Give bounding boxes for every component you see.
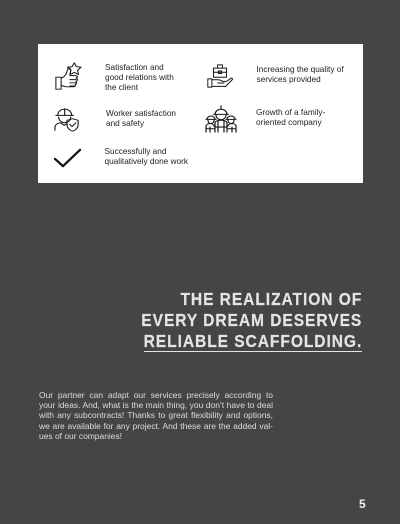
body text (39, 390, 273, 441)
text: quality work (104, 147, 188, 166)
text: service quality (256, 65, 344, 84)
icon: hand with briefcase (207, 64, 233, 88)
body text: with any subcontracts! Thanks to great flexibility and options, (39, 410, 273, 420)
panel: added values (38, 44, 363, 183)
body text: we are available for any project. And these are the added val- (39, 421, 273, 431)
heading (141, 289, 362, 352)
heading: THE REALIZATION OF (180, 289, 362, 309)
text: family company: oriented company (256, 118, 322, 127)
page number: 5 (359, 497, 366, 511)
text: quality work: qualitatively done work (104, 157, 188, 166)
body text: ues of our companies! (39, 431, 122, 441)
text: satisfaction (105, 63, 174, 92)
text: satisfaction: Satisfaction and (105, 63, 164, 72)
text: worker safety: and safety (106, 119, 144, 128)
icon: check mark (54, 148, 82, 168)
text: family company (256, 108, 325, 127)
text: worker safety: Worker satisfaction (106, 109, 176, 118)
text: service quality: services provided (256, 75, 321, 84)
heading: RELIABLE SCAFFOLDING. (143, 331, 362, 351)
icon: thumbs up with star (55, 62, 82, 90)
icon: worker with shield (54, 108, 79, 132)
text: satisfaction: good relations with (105, 73, 174, 82)
heading: EVERY DREAM DESERVES (141, 310, 362, 330)
text: family company: Growth of a family- (256, 108, 325, 117)
text: quality work: Successfully and (104, 147, 166, 156)
icon: worker group (205, 105, 237, 133)
body text: Our partner can adapt our services precisely according to (39, 390, 273, 400)
body text: your ideas. And, what is the main thing, you don’t have to deal (39, 400, 273, 410)
text: worker safety (106, 109, 176, 128)
text: satisfaction: the client (105, 83, 138, 92)
text: service quality: Increasing the quality of (256, 65, 344, 74)
